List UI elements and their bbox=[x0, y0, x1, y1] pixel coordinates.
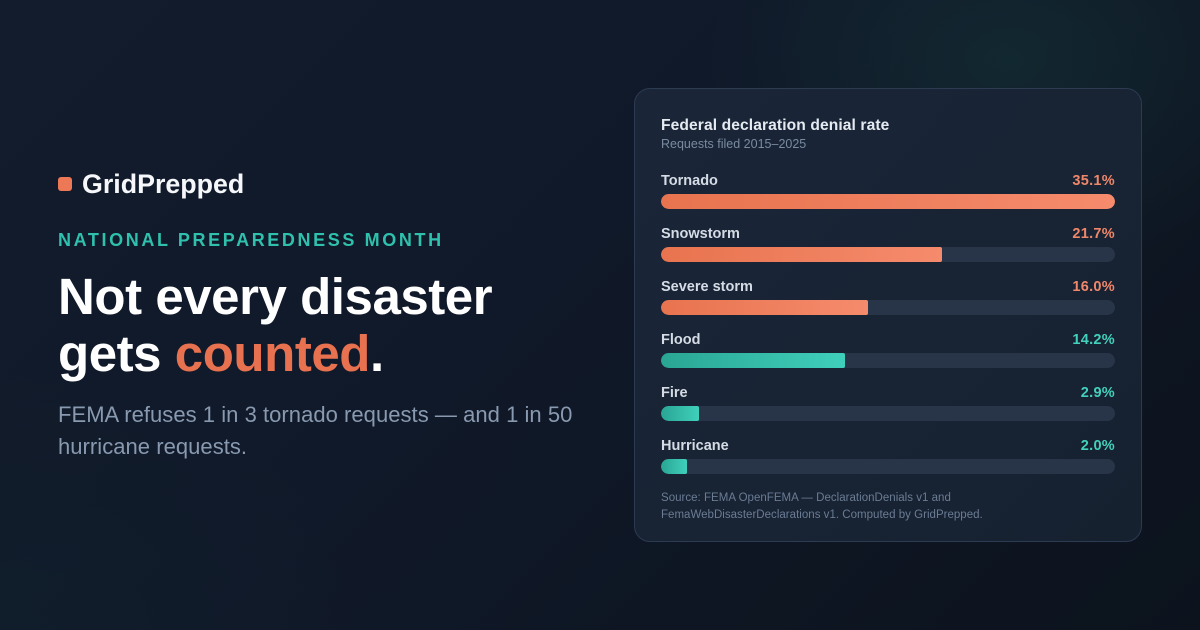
row: Snowstorm: Snowstorm bbox=[661, 226, 740, 242]
panel: denial rate chart bbox=[634, 88, 1142, 542]
row: Flood bbox=[661, 332, 1115, 368]
row: Flood: Flood bbox=[661, 332, 700, 348]
subtitle: hurricane requests. bbox=[58, 434, 247, 459]
row: Snowstorm bbox=[661, 226, 1115, 262]
row: Snowstorm: 21.7% bbox=[1072, 226, 1115, 242]
source note: Source: FEMA OpenFEMA — DeclarationDenials v1 and bbox=[661, 492, 951, 504]
row: Flood: 14.2% bbox=[1072, 332, 1115, 348]
subtitle bbox=[58, 402, 572, 459]
row: Tornado: Tornado bbox=[661, 173, 718, 189]
row: Severe storm: Severe storm bbox=[661, 279, 753, 295]
icon: logo square bbox=[58, 177, 72, 191]
source note bbox=[661, 492, 983, 521]
title bbox=[58, 268, 492, 382]
chart title: Federal declaration denial rate bbox=[661, 117, 889, 134]
title: gets counted. bbox=[58, 325, 384, 382]
brand name: GridPrepped bbox=[82, 169, 244, 199]
row: Hurricane: Hurricane bbox=[661, 438, 729, 454]
logo bbox=[58, 169, 244, 199]
chart subtitle: Requests filed 2015–2025 bbox=[661, 137, 806, 151]
row: Fire bbox=[661, 385, 1115, 421]
source note: FemaWebDisasterDeclarations v1. Computed by GridPrepped. bbox=[661, 509, 983, 521]
row: Fire: 2.9% bbox=[1081, 385, 1115, 401]
title: Not every disaster bbox=[58, 268, 492, 325]
row: Tornado bbox=[661, 173, 1115, 209]
row: Fire: Fire bbox=[661, 385, 688, 401]
row: Severe storm: 16.0% bbox=[1072, 279, 1115, 295]
row: Hurricane bbox=[661, 438, 1115, 474]
row: Tornado: 35.1% bbox=[1072, 173, 1115, 189]
eyebrow: NATIONAL PREPAREDNESS MONTH bbox=[58, 230, 444, 250]
row: Hurricane: 2.0% bbox=[1081, 438, 1115, 454]
row: Severe storm bbox=[661, 279, 1115, 315]
subtitle: FEMA refuses 1 in 3 tornado requests — and 1 in 50 bbox=[58, 402, 572, 427]
